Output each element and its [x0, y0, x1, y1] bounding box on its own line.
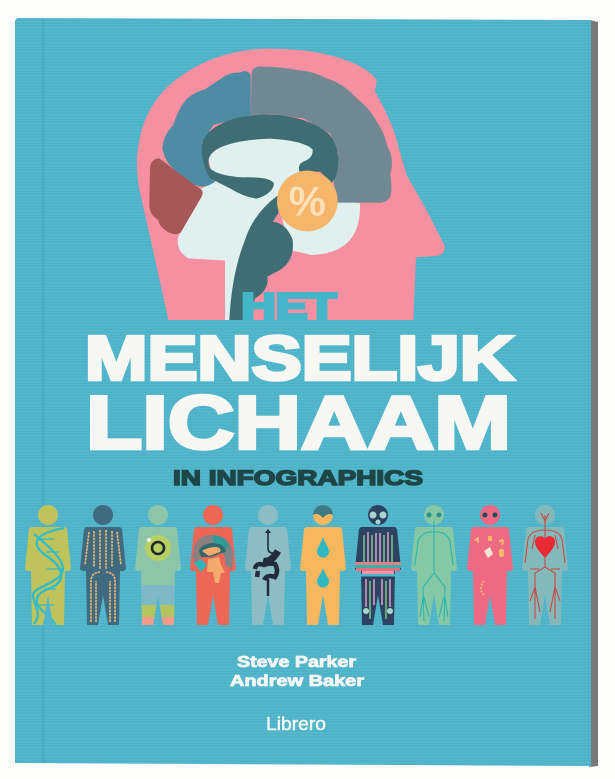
figure: brain — [190, 505, 236, 625]
dark brain stem — [229, 195, 293, 320]
figure: heart and blood vessels — [522, 505, 568, 625]
figure: digestion — [245, 505, 291, 625]
figure: cell — [133, 505, 183, 625]
author: Andrew Baker: Andrew Baker — [230, 673, 364, 690]
author: Steve Parker: Steve Parker — [237, 654, 356, 671]
figure: nervous system — [411, 505, 457, 625]
book spine crease — [42, 19, 44, 763]
title: Menselijk: MENSELIJK — [85, 324, 514, 394]
heart icon — [535, 536, 555, 558]
figure: water drops — [300, 505, 346, 625]
page shadow at right edge — [589, 20, 598, 767]
publisher: Librero: Librero — [266, 713, 326, 734]
head silhouette — [137, 49, 445, 320]
dark corpus callosum ring — [202, 114, 338, 199]
water drop icon — [317, 537, 329, 558]
figure: DNA — [25, 505, 71, 625]
figure: muscle pattern — [355, 505, 401, 625]
red cerebellum lobe — [149, 158, 203, 234]
grey parietal brain lobe — [251, 66, 392, 203]
light inner anatomy — [178, 173, 360, 320]
water drop icon — [317, 568, 329, 588]
orange percent circle — [277, 171, 338, 231]
title: Het: HET — [242, 286, 337, 326]
head illustration with brain — [137, 49, 445, 320]
light brain interior — [208, 137, 315, 207]
subtitle: In infographics: IN INFOGRAPHICS — [173, 467, 423, 490]
orange percent circle: % — [289, 178, 326, 225]
blue frontal brain lobe — [162, 71, 251, 187]
title: Lichaam: LICHAAM — [86, 380, 511, 464]
figure: glands — [467, 505, 513, 625]
figure: skeleton — [80, 505, 126, 625]
